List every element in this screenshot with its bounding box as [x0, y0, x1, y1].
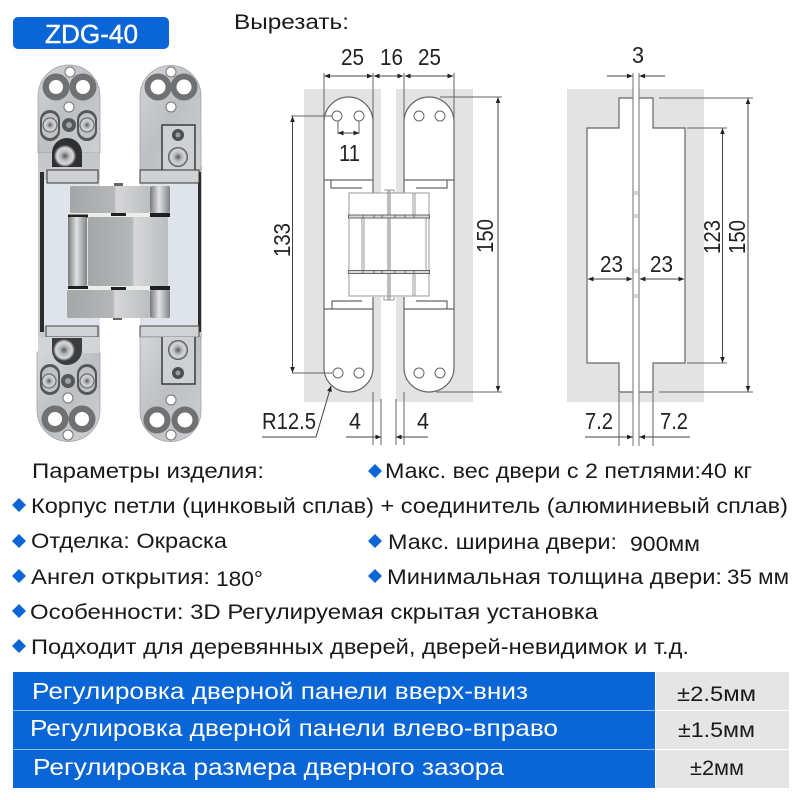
- spec: opening angle: Ангел открытия:: [31, 566, 210, 589]
- right leaf outline: [404, 97, 454, 392]
- table backgrounds: [13, 672, 789, 788]
- dimension: 25 16 25: 25: [341, 44, 364, 70]
- row: gap adjustment: Регулировка размера дверного зазора: [33, 754, 504, 780]
- dimension: 4 and 4: [346, 392, 429, 445]
- dimension: 11: 11: [339, 140, 360, 166]
- spec: opening angle: 180°: [216, 568, 263, 591]
- spec: max door width: 900мм: [630, 533, 700, 556]
- heading: cutout: Вырезать:: [234, 11, 349, 34]
- hinge body: [67, 183, 170, 320]
- bottom left plate: [37, 337, 100, 442]
- parameters heading: Параметры изделия:: [32, 460, 264, 483]
- row: left-right adjustment: [30, 715, 755, 742]
- dimension: 23 and 23: 23: [600, 251, 623, 277]
- model badge: ZDG-40: [45, 19, 138, 49]
- dimension: 7.2 and 7.2: 7.2: [660, 408, 688, 434]
- dimension: 23 and 23: [588, 251, 684, 279]
- hinge photo: [37, 65, 202, 442]
- hinge body outline: [348, 190, 430, 300]
- bottom right plate: [140, 337, 201, 442]
- adjustment table: [13, 672, 789, 788]
- row: up-down adjustment: Регулировка дверной панели вверх-вниз: [32, 678, 528, 704]
- model badge: [13, 17, 169, 49]
- dimension: 150: [659, 98, 753, 392]
- dimension: 11: [338, 121, 360, 166]
- dimension: 4 and 4: 4: [417, 408, 429, 434]
- grey background: [567, 89, 704, 402]
- grey mortise bands: [304, 89, 473, 402]
- brackets: [46, 170, 199, 337]
- spec: minimum door thickness: 35 мм: [727, 566, 789, 589]
- dimension: 4 and 4: 4: [349, 408, 361, 434]
- dimension: 150: 150: [472, 219, 498, 253]
- dimension: 23 and 23: 23: [650, 251, 673, 277]
- dimension: 25 16 25: 25: [418, 44, 441, 70]
- dimension: 133: 133: [269, 223, 295, 257]
- row: left-right adjustment: Регулировка дверной панели влево-вправо: [30, 715, 558, 741]
- dimension: 25 16 25: [324, 44, 454, 120]
- dimension: 123: 123: [699, 220, 725, 254]
- dimension: 150: 150: [724, 220, 750, 254]
- top right plate: [140, 65, 201, 170]
- row: left-right adjustment: ±1.5мм: [678, 719, 755, 742]
- dimension: R12.5: [262, 386, 331, 437]
- spec: finish: Отделка: Окраска: [31, 530, 227, 553]
- top left plate: [38, 65, 100, 167]
- left leaf outline: [324, 97, 373, 392]
- row: gap adjustment: [33, 754, 744, 780]
- spec: opening angle: [12, 566, 263, 591]
- frame behind the hinge body: [38, 166, 202, 338]
- dimension: 7.2 and 7.2: [585, 408, 690, 437]
- spec: max door width: Макс. ширина двери:: [388, 531, 617, 554]
- dimension: 150: [436, 97, 502, 392]
- cutout shape: [587, 73, 685, 446]
- dimension: 7.2 and 7.2: 7.2: [585, 408, 613, 434]
- row: up-down adjustment: [32, 678, 756, 706]
- spec: suitable doors: Подходит для деревянных дверей, дверей-невидимок и т.д.: [31, 636, 689, 659]
- dimension: 123: [687, 128, 727, 363]
- spec: minimum door thickness: Минимальная толщина двери:: [387, 566, 722, 589]
- dimension: 3: [607, 42, 665, 76]
- dimension: R12.5: R12.5: [262, 408, 316, 434]
- spec: features: Особенности: 3D Регулируемая скрытая установка: [30, 601, 598, 624]
- dimension: 3: 3: [632, 42, 644, 68]
- spec: body material: Корпус петли (цинковый сплав) + соединитель (алюминиевый сплав): [31, 495, 788, 518]
- row: up-down adjustment: ±2.5мм: [677, 683, 756, 706]
- drawing: front view with dimensions: [262, 44, 502, 445]
- spec: max door width: [368, 531, 700, 556]
- dimension: 133: [269, 116, 332, 373]
- spec: max door weight: Макс. вес двери с 2 петлями:40 кг: [385, 460, 752, 483]
- dimension: 25 16 25: 16: [380, 44, 403, 70]
- drawing: cutout view with dimensions: [567, 42, 753, 446]
- row: gap adjustment: ±2мм: [690, 757, 744, 780]
- product parameters: [12, 460, 789, 659]
